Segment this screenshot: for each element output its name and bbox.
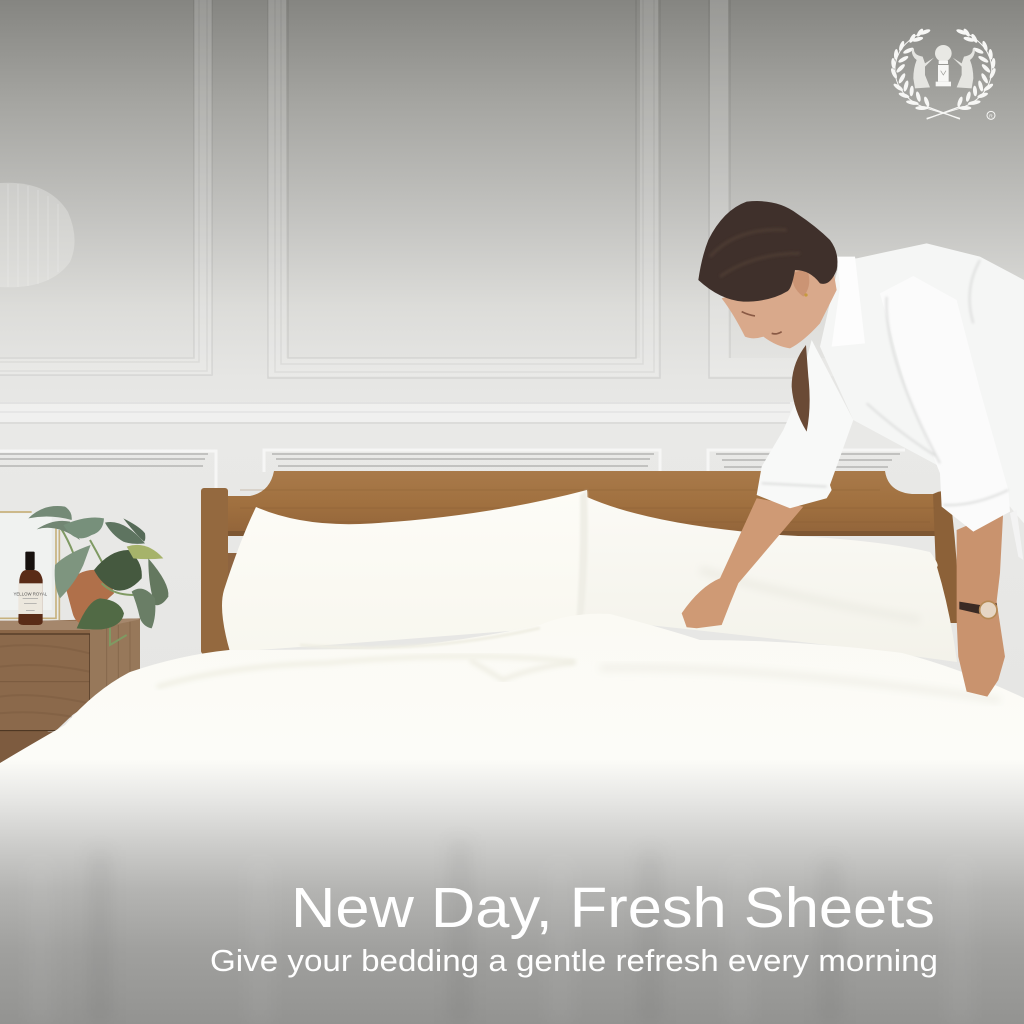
white duvet with fade (0, 614, 1024, 1024)
kneeling figures (912, 49, 975, 88)
wall panel mouldings (0, 0, 1024, 660)
subheading: Give your bedding a gentle refresh every morning (210, 943, 938, 978)
ponytail (792, 345, 810, 432)
photo frame (0, 512, 59, 620)
nightstand with frame, bottle and plant (0, 506, 168, 763)
central pedestal with urn (935, 45, 952, 86)
nightstand (0, 618, 140, 763)
registered mark: R (989, 113, 993, 119)
wooden bed headboard (201, 471, 960, 654)
woman tucking the bed sheets (682, 201, 1024, 697)
logo: laurel wreath emblem (890, 28, 997, 119)
left arm and hand (682, 498, 803, 628)
wrist watch (959, 601, 997, 619)
face and neck (722, 270, 837, 348)
potted plant (28, 506, 168, 645)
amber bottle: YELLOW ROYAL (14, 591, 48, 596)
right pillow (580, 497, 957, 662)
shirt (757, 243, 1024, 560)
hair (698, 201, 837, 302)
left pillow (222, 490, 588, 652)
duvet drape folds (40, 840, 960, 1024)
headline: New Day, Fresh Sheets (291, 876, 935, 940)
right arm and hand with watch (957, 510, 1005, 697)
amber bottle (14, 552, 48, 625)
laurel crossing stems (927, 107, 960, 119)
pendant lamp (0, 183, 75, 287)
